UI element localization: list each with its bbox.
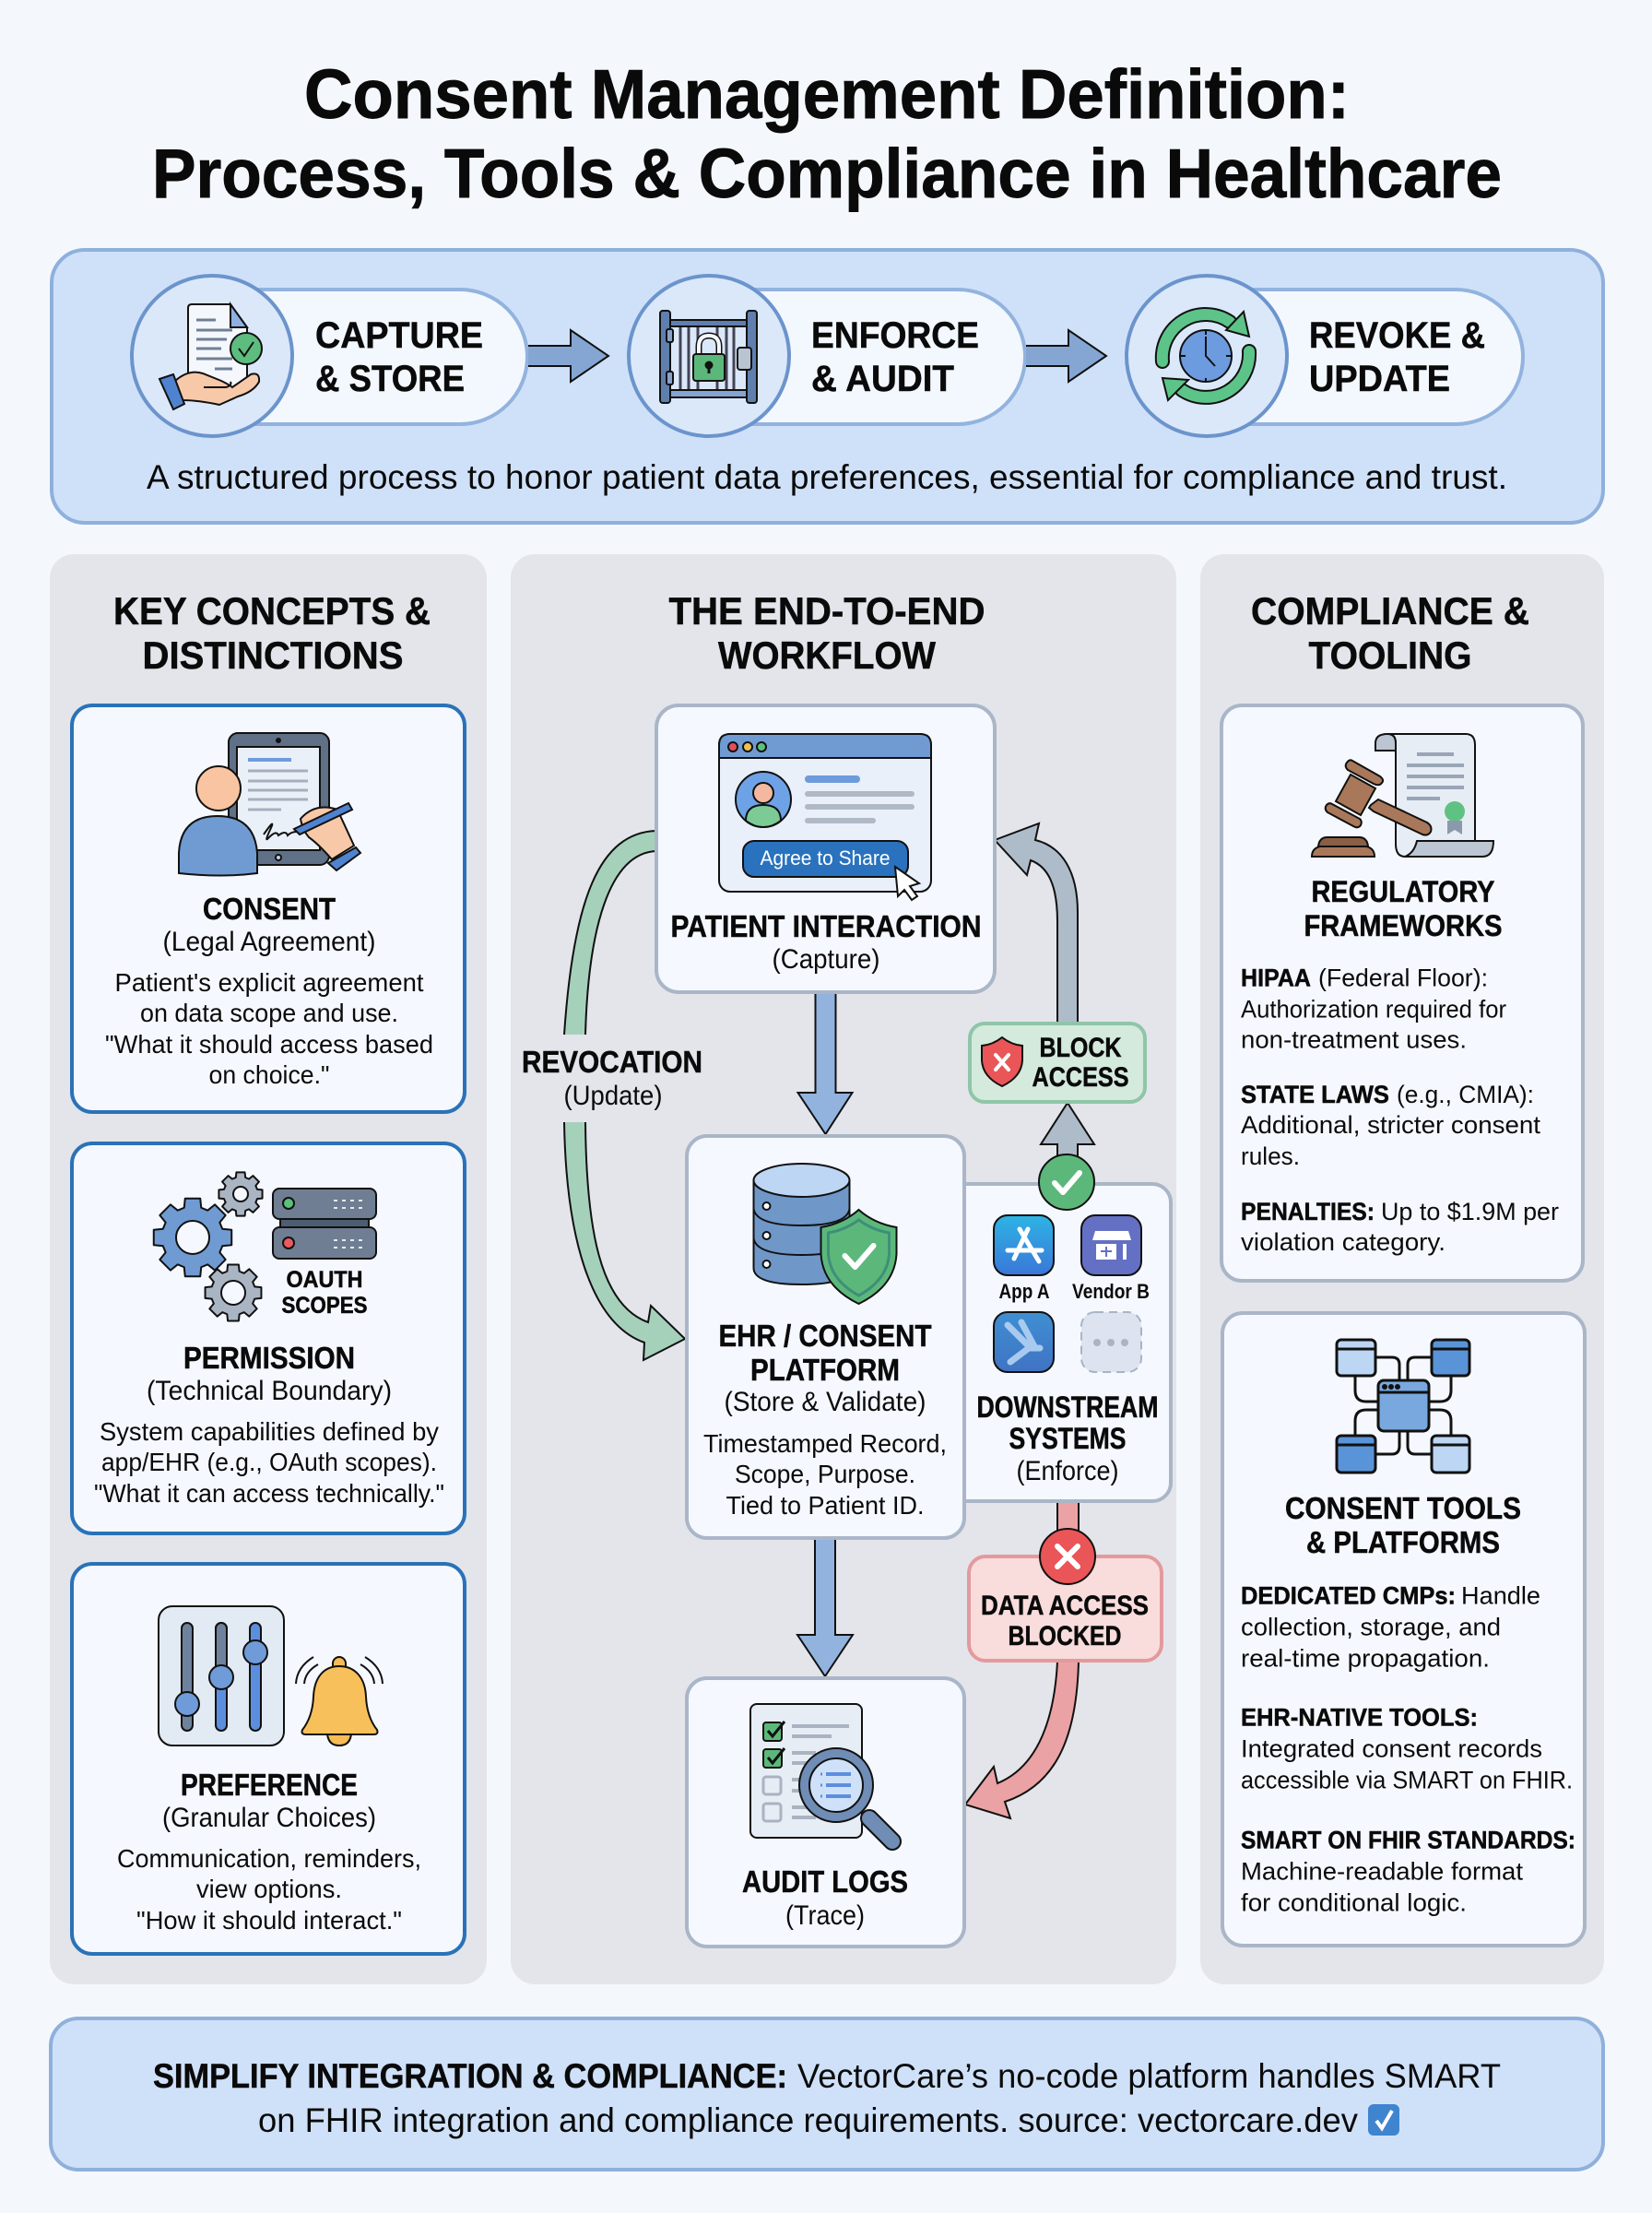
title: Consent Management Definition: [304, 55, 1350, 133]
label: DOWNSTREAM [977, 1391, 1158, 1424]
heading: COMPLIANCE & [1251, 589, 1529, 633]
connector: downstream to blocked [1057, 1503, 1079, 1540]
arrow: block access to patient [995, 823, 1078, 1023]
badge: denied [1040, 1529, 1095, 1584]
button label: Agree to Share [760, 846, 891, 870]
card: downstream systems [922, 1184, 1171, 1501]
text: dedicated cmps [1241, 1582, 1540, 1673]
card: ehr consent platform [687, 1136, 964, 1538]
label: (Store & Validate) [725, 1387, 926, 1417]
text: hipaa: non-treatment uses. [1241, 1025, 1467, 1053]
icon: patient signing tablet [179, 733, 360, 876]
card: patient interaction [656, 705, 995, 992]
label: Scope, Purpose. [735, 1460, 915, 1488]
label: ACCESS [1032, 1062, 1128, 1093]
label: vendor b: Vendor B [1072, 1280, 1150, 1303]
label: & PLATFORMS [1306, 1525, 1500, 1559]
icon: sliders and bell [159, 1606, 383, 1746]
label: REGULATORY [1311, 875, 1495, 908]
text: app/EHR (e.g., OAuth scopes). [101, 1448, 437, 1476]
label: oauth scopes: OAUTH [286, 1267, 363, 1293]
tagline: A structured process to honor patient data preferences, essential for compliance and trust. [147, 458, 1507, 496]
label: EHR / CONSENT [719, 1319, 931, 1353]
icon: gate and lock [660, 311, 757, 403]
text: penalties: PENALTIES: [1241, 1198, 1375, 1225]
label [742, 1864, 908, 1931]
panel: key concepts [50, 554, 487, 1984]
text [105, 892, 433, 1089]
arrow: capture to platform [798, 993, 852, 1134]
label: BLOCK [1040, 1033, 1122, 1063]
icon: connected windows [1337, 1340, 1469, 1473]
label: (Capture) [773, 944, 879, 975]
heading: TOOLING [1309, 633, 1471, 677]
label [1285, 1491, 1521, 1559]
label: revocation [522, 1045, 702, 1111]
arrow [528, 330, 608, 382]
label: oauth scopes [282, 1267, 367, 1319]
panel: process banner [52, 250, 1603, 523]
card: block access [970, 1024, 1145, 1102]
arrow [1026, 330, 1106, 382]
step: capture and store [132, 276, 527, 436]
heading [113, 589, 431, 677]
text: on data scope and use. [140, 999, 398, 1027]
label: CAPTURE [315, 315, 483, 356]
text: hipaa [1241, 964, 1506, 1053]
label: AUDIT LOGS [742, 1864, 908, 1899]
text: PREFERENCE [181, 1768, 358, 1802]
text: penalties [1241, 1198, 1559, 1256]
text [94, 1341, 444, 1508]
label: oauth scopes: SCOPES [282, 1293, 367, 1319]
label: REVOKE & [1309, 315, 1485, 356]
label [1304, 875, 1503, 942]
icon: document in hand [159, 304, 262, 409]
card: regulatory frameworks [1221, 705, 1583, 1281]
text: PERMISSION [183, 1341, 355, 1375]
text: penalties: Up to $1.9M per [1381, 1198, 1559, 1225]
text: "What it can access technically." [94, 1479, 444, 1508]
text: (Technical Boundary) [147, 1376, 392, 1406]
heading: DISTINCTIONS [142, 633, 404, 677]
text: Patient's explicit agreement [114, 968, 424, 997]
icon: database and shield [754, 1164, 896, 1304]
label [981, 1591, 1149, 1651]
text: (Legal Agreement) [162, 927, 376, 957]
label [703, 1319, 947, 1520]
icon: cursor [895, 867, 919, 900]
text: state laws: rules. [1241, 1142, 1300, 1170]
label: ENFORCE [811, 315, 979, 356]
text: ehr-native tools: accessible via SMART on FHIR. [1241, 1767, 1573, 1794]
text: smart on fhir standards: Machine-readable format [1241, 1857, 1524, 1885]
title: Process, Tools & Compliance in Healthcare [152, 135, 1502, 212]
label: revocation: (Update) [564, 1081, 662, 1111]
label [1309, 315, 1485, 399]
text: dedicated cmps: DEDICATED CMPs: [1241, 1582, 1456, 1610]
text: state laws: (e.g., CMIA): [1397, 1081, 1534, 1108]
heading: KEY CONCEPTS & [113, 589, 431, 633]
text: System capabilities defined by [100, 1417, 439, 1446]
heading [1251, 589, 1529, 677]
label: PLATFORM [750, 1353, 900, 1387]
label: Tied to Patient ID. [726, 1491, 924, 1520]
arrow: revocation [564, 831, 685, 1360]
text: on choice." [208, 1060, 330, 1089]
card: permission [72, 1143, 465, 1533]
heading [669, 589, 985, 677]
label: (Enforce) [1016, 1456, 1119, 1486]
icon: vendor b [1081, 1215, 1141, 1275]
icon: gavel and scroll [1312, 734, 1493, 857]
text: state laws: Additional, stricter consent [1241, 1111, 1540, 1139]
icon: app c [994, 1312, 1054, 1372]
label: app a: App A [999, 1280, 1050, 1303]
label: CONSENT TOOLS [1285, 1491, 1521, 1525]
badge: approved check [1039, 1154, 1094, 1210]
label [811, 315, 979, 399]
text: SIMPLIFY INTEGRATION & COMPLIANCE: [153, 2057, 787, 2095]
label: BLOCKED [1009, 1621, 1121, 1651]
label: Timestamped Record, [703, 1429, 947, 1458]
text [153, 2057, 1501, 2139]
icon: red shield [982, 1037, 1022, 1086]
step: enforce and audit [629, 276, 1025, 436]
card: consent [72, 705, 465, 1112]
label: SYSTEMS [1009, 1422, 1127, 1455]
text: on FHIR integration and compliance requirements. source: vectorcare.dev [258, 2101, 1358, 2139]
text: state laws: STATE LAWS [1241, 1081, 1389, 1108]
label: UPDATE [1309, 359, 1450, 399]
text: view options. [196, 1875, 342, 1903]
label [977, 1391, 1158, 1486]
label: (Trace) [785, 1900, 865, 1931]
text: CONSENT [203, 892, 336, 926]
label: PATIENT INTERACTION [671, 909, 981, 943]
text: ehr-native tools [1241, 1704, 1573, 1794]
icon: browser consent form [719, 734, 931, 892]
icon: gears and server [154, 1172, 376, 1320]
panel: footer callout [51, 2018, 1603, 2170]
text: dedicated cmps: Handle [1461, 1582, 1540, 1610]
heading: THE END-TO-END [669, 589, 985, 633]
icon: clock with cycle arrows [1162, 312, 1249, 400]
label: & STORE [315, 359, 465, 399]
text: smart on fhir standards: for conditional logic. [1241, 1888, 1467, 1916]
text: dedicated cmps: collection, storage, and [1241, 1614, 1501, 1641]
text: VectorCare’s no-code platform handles SMART [797, 2057, 1501, 2095]
label [315, 315, 483, 399]
text: state laws [1241, 1081, 1540, 1170]
label: FRAMEWORKS [1304, 909, 1503, 942]
heading: WORKFLOW [718, 633, 936, 677]
panel: compliance and tooling [1200, 554, 1604, 1984]
text: hipaa: HIPAA [1241, 964, 1311, 992]
text: ehr-native tools: EHR-NATIVE TOOLS: [1241, 1704, 1478, 1732]
label [1032, 1033, 1128, 1093]
text: smart on fhir standards [1241, 1826, 1575, 1916]
arrow: platform to audit [797, 1538, 853, 1676]
text: "What it should access based [105, 1030, 433, 1059]
icon: app a [994, 1215, 1054, 1275]
arrow: downstream to block access [1041, 1103, 1094, 1157]
text: penalties: violation category. [1241, 1228, 1446, 1256]
panel: workflow [511, 554, 1176, 1984]
label: & AUDIT [811, 359, 954, 399]
card: preference [72, 1564, 465, 1954]
text: dedicated cmps: real-time propagation. [1241, 1645, 1490, 1673]
card: consent tools [1222, 1313, 1585, 1946]
label [671, 909, 981, 975]
text: hipaa: Authorization required for [1241, 996, 1506, 1024]
arrow: blocked to audit [965, 1662, 1079, 1818]
title [152, 55, 1502, 212]
icon: more placeholder [1081, 1312, 1141, 1372]
icon: check box [1368, 2104, 1399, 2136]
step: revoke and update [1127, 276, 1523, 436]
text: ehr-native tools: Integrated consent records [1241, 1735, 1542, 1763]
text [117, 1768, 421, 1935]
card: audit logs [687, 1678, 964, 1947]
icon: checklist and magnifier [750, 1704, 892, 1841]
text: hipaa: (Federal Floor): [1318, 964, 1488, 992]
text: smart on fhir standards: SMART ON FHIR STANDARDS: [1241, 1826, 1575, 1853]
text: "How it should interact." [136, 1906, 402, 1935]
text: (Granular Choices) [162, 1803, 376, 1833]
label: DATA ACCESS [981, 1591, 1149, 1621]
label: revocation: REVOCATION [522, 1045, 702, 1079]
card: data access blocked [969, 1529, 1162, 1661]
text: Communication, reminders, [117, 1844, 421, 1873]
